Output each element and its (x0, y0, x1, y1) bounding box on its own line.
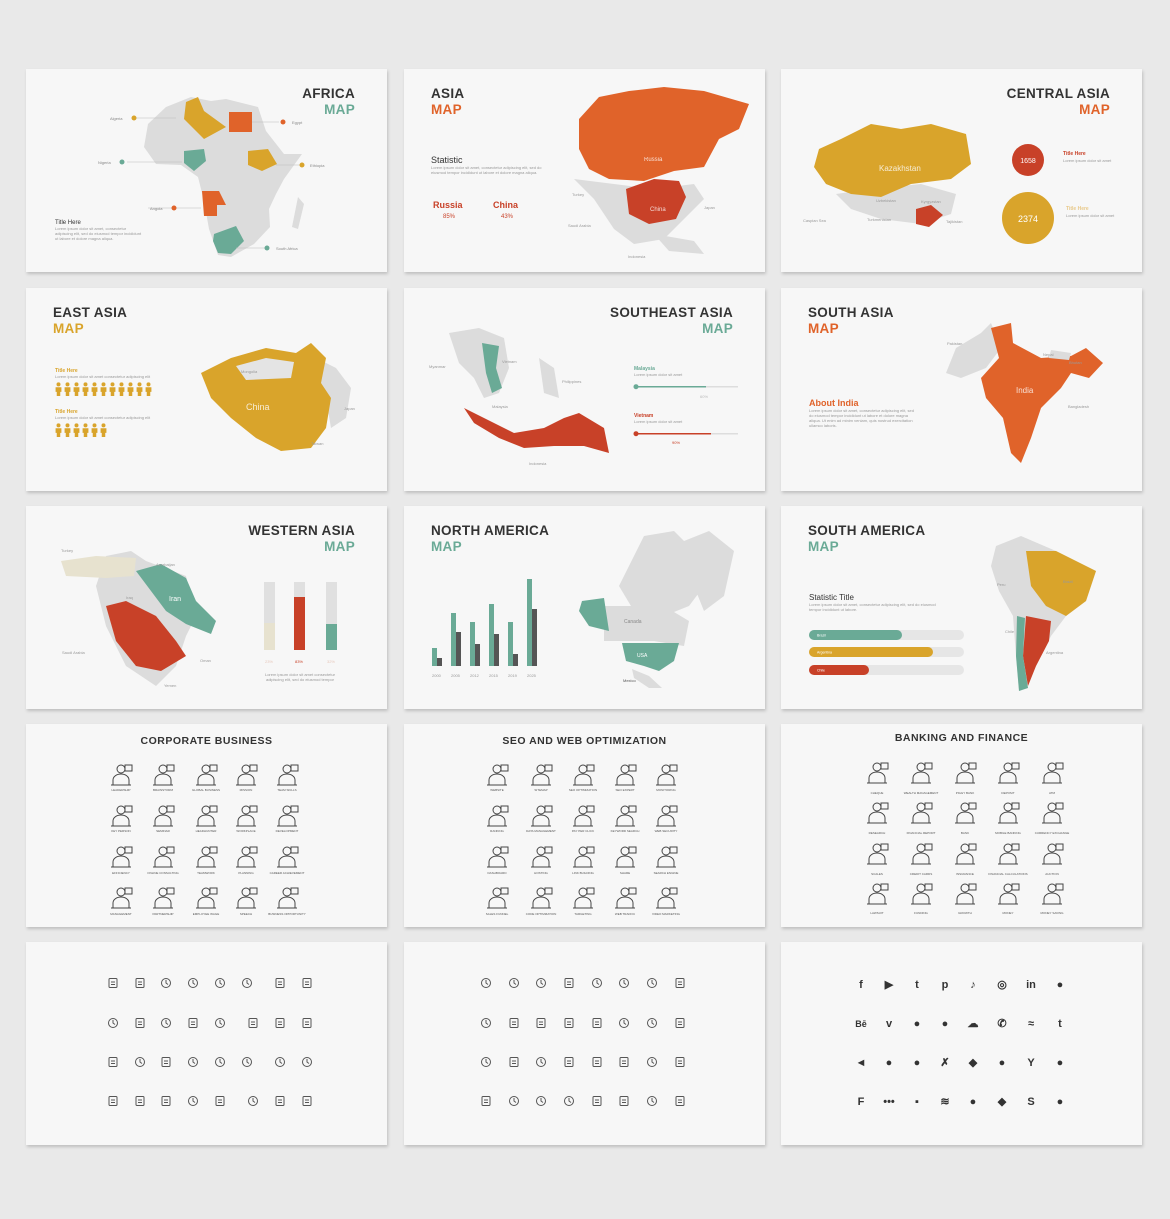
stats: people: Title Here (55, 368, 78, 374)
title (431, 86, 464, 117)
title (248, 523, 355, 554)
icon grid: DEPOSIT (1001, 791, 1015, 795)
panel: small icons 1 (26, 942, 387, 1145)
icon grid: CREDIT CARDS (910, 872, 932, 876)
map: western asia: adipiscing elit, sed do eiusmod tempor (266, 677, 335, 682)
icon grid: ● (970, 1096, 976, 1108)
chart + map: USA (637, 653, 648, 659)
icon grid (867, 762, 1070, 915)
map: africa: Ethiopia (310, 163, 325, 168)
map: east asia: China (246, 402, 270, 412)
icon grid: PIGGY BANK (956, 791, 974, 795)
icon grid: PLANNING (238, 871, 254, 875)
map: central asia: Lorem ipsum dolor sit amet (1066, 213, 1115, 218)
panel: east asia (26, 288, 387, 491)
map: southeast asia: Malaysia (634, 366, 655, 372)
text block: statistic (431, 155, 542, 175)
stats: people (55, 368, 152, 437)
map: central asia: Kyrgyzstan (921, 199, 941, 204)
title (808, 305, 894, 336)
map: central asia: Title Here (1066, 206, 1089, 212)
icon grid: SHARE (620, 871, 630, 875)
text block: Statistic Title (809, 593, 854, 602)
map: central asia: 2374 (1018, 214, 1038, 224)
icon grid: ● (1057, 1057, 1063, 1069)
text block: Lorem ipsum dolor sit amet, consectetur adipiscing elit, sed do eiusmod tempor incididunt ut labore et dolore magna aliqua. (55, 226, 141, 241)
icon grid: FUNDING (914, 911, 928, 915)
map: africa: Algeria (110, 116, 123, 121)
icon grid: ✆ (997, 1018, 1007, 1030)
icon grid: GLOBAL BUSINESS (192, 788, 220, 792)
icon grid: WEB TRAFFIC (615, 912, 636, 916)
icon grid: ● (999, 1057, 1005, 1069)
icon grid: ≈ (1028, 1018, 1034, 1030)
title: NORTH AMERICA (431, 523, 549, 538)
icon grid: LEADERSHIP (111, 788, 131, 792)
map: southeast asia: Vietnam (502, 359, 517, 364)
panel: western asia (26, 506, 387, 709)
icon grid: CHEQUE (871, 791, 883, 795)
map: south america: Chile (1005, 629, 1015, 634)
map: western asia: 32% (327, 659, 335, 664)
map: india: Bhutan (1069, 360, 1082, 365)
map: east asia (201, 343, 355, 451)
icon grid: WEB SECURITY (655, 829, 677, 833)
map: western asia: Oman (200, 658, 211, 663)
panel: small icons 2 (404, 942, 765, 1145)
map: asia: Indonesia (628, 254, 646, 259)
icon grid: ◎ (997, 979, 1007, 991)
map: southeast asia: Malaysia (492, 404, 509, 409)
icon grid: HOSTING (534, 871, 548, 875)
chart + map: Canada (624, 619, 642, 625)
icon grid: ≋ (940, 1096, 950, 1108)
icon grid: v (886, 1018, 893, 1030)
icon grid: MOBILE BANKING (995, 831, 1021, 835)
icon grid: FINANCIAL CALCULATIONS (988, 872, 1028, 876)
map: africa (98, 97, 325, 257)
map: southeast asia: Vietnam (634, 413, 654, 419)
map: africa: South Africa (276, 246, 298, 251)
title: MAP (324, 102, 355, 117)
title: SOUTH AMERICA (808, 523, 925, 538)
panel: asia map: Russia (433, 200, 463, 210)
icon grid: SCALES (871, 872, 883, 876)
icon grid: ☁ (968, 1018, 978, 1030)
icon grid: PAY PER CLICK (572, 829, 594, 833)
panel: asia map (404, 69, 765, 272)
map: india: India (1016, 386, 1034, 395)
map: south america (809, 536, 1096, 691)
icon grid: LAWSUIT (870, 911, 884, 915)
title: AFRICA (302, 86, 355, 101)
icon grid: LINK BUILDING (572, 871, 594, 875)
icon grid: WORKPLACE (236, 829, 256, 833)
icon grid: ATM (1049, 791, 1056, 795)
icon grid: CURRENCY EXCHANGE (1035, 831, 1069, 835)
icon grid: DASHBOARD (487, 871, 507, 875)
heading: CORPORATE BUSINESS (141, 735, 272, 747)
stats: people: Lorem ipsum dolor sit amet consectetur adipiscing elit (55, 415, 150, 420)
icon grid: SPEECH (240, 912, 252, 916)
title: MAP (808, 539, 839, 554)
panel: africa map (26, 69, 387, 272)
icon grid: S (1027, 1096, 1035, 1108)
icon grid: ● (942, 1018, 948, 1030)
map: central asia: Tajikistan (946, 219, 962, 224)
map: south america: Peru (997, 582, 1005, 587)
chart + map: 2019 (508, 673, 518, 678)
icon grid: ◆ (968, 1057, 978, 1069)
map: africa: Angola (150, 206, 163, 211)
icon grid: ▪ (915, 1096, 919, 1108)
map: western asia: Iran (169, 596, 181, 603)
map: asia: Saudi Arabia (568, 223, 591, 228)
icon grid: SEARCH ENGINE (654, 871, 678, 875)
map: central asia: 1658 (1020, 158, 1036, 165)
panel: corporate business icons (26, 724, 387, 927)
map: western asia: Lorem ipsum dolor sit amet consectetur (265, 672, 336, 677)
icon grid: EMPLOYEE WAGE (193, 912, 219, 916)
title: MAP (431, 102, 462, 117)
title: SOUTHEAST ASIA (610, 305, 733, 320)
map: western asia: Azerbaijan (156, 562, 175, 567)
map: asia: Japan (704, 205, 715, 210)
map: southeast asia: Philippines (562, 379, 581, 384)
map: south america: Brazil (817, 634, 826, 638)
icon grid: ◄ (856, 1057, 866, 1069)
map: south america: Chile (817, 668, 825, 672)
icon grid: t (1058, 1018, 1062, 1030)
icon grid (481, 978, 684, 1106)
chart + map: 2000 (432, 673, 442, 678)
icon grid: INSURANCE (956, 872, 974, 876)
map: asia: Turkey (572, 192, 584, 197)
icon grid: KEYWORD SEARCH (611, 829, 639, 833)
icon grid: in (1026, 979, 1036, 991)
icon grid (108, 978, 312, 1106)
title (302, 86, 355, 117)
icon grid: ● (914, 1057, 920, 1069)
icon grid: BANK (961, 831, 969, 835)
chart + map: Mexico (623, 678, 636, 683)
text block: Title Here (55, 220, 81, 226)
panel: asia map: 43% (501, 214, 513, 220)
icon grid: SEO EXPERT (615, 788, 635, 792)
icon grid: ONLINE CONSULTING (147, 871, 179, 875)
map: central asia: Turkmenistan (867, 217, 891, 222)
text block (809, 398, 914, 428)
icon grid: Y (1027, 1057, 1035, 1069)
icon grid (855, 979, 1063, 1108)
text block (55, 220, 142, 241)
map: asia: China (650, 207, 666, 213)
icon grid: ••• (883, 1096, 895, 1108)
map: western asia: 23% (265, 659, 273, 664)
stats: people: Title Here (55, 409, 78, 415)
map: western asia: Turkey (61, 548, 73, 553)
stats (433, 200, 518, 220)
icon grid: TARGETING (574, 912, 592, 916)
icon grid: SEMINAR (156, 829, 171, 833)
icon grid: MONITORING (656, 788, 676, 792)
map: east asia: Taiwan (311, 441, 323, 446)
icon grid: ● (886, 1057, 892, 1069)
icon grid: t (915, 979, 919, 991)
icon grid (110, 764, 306, 916)
title: MAP (53, 321, 84, 336)
icon grid: BUSINESS OPPORTUNITY (268, 912, 306, 916)
icon grid: FINANCIAL REPORT (907, 831, 936, 835)
panel: banking icons (781, 724, 1142, 927)
map: central asia: Kazakhstan (879, 164, 921, 173)
icon grid: ✗ (940, 1057, 950, 1069)
icon grid: F (858, 1096, 865, 1108)
icon grid: BRAINSTORM (153, 788, 173, 792)
map: india: Pakistan (947, 341, 962, 346)
map: africa: Nigeria (98, 160, 111, 165)
title: MAP (808, 321, 839, 336)
heading: SEO AND WEB OPTIMIZATION (502, 735, 667, 747)
map: central asia: Title Here (1063, 151, 1086, 157)
text block: About India (809, 398, 858, 408)
title: MAP (702, 321, 733, 336)
icon grid (486, 764, 681, 916)
title (1007, 86, 1110, 117)
icon grid: SITEMAP (534, 788, 548, 792)
panel: central asia (781, 69, 1142, 272)
map: southeast asia: Lorem ipsum dolor sit amet (634, 419, 683, 424)
icon grid: KEY PERSON (111, 829, 131, 833)
icon grid: TEAM SKILLS (277, 788, 297, 792)
heading: BANKING AND FINANCE (895, 732, 1028, 744)
chart + map: 2025 (527, 673, 537, 678)
title (808, 523, 925, 554)
stats: people: Lorem ipsum dolor sit amet consectetur adipiscing elit (55, 374, 150, 379)
map: east asia: Mongolia (241, 369, 258, 374)
icon grid: DATA MANAGEMENT (526, 829, 556, 833)
panel: seo icons (404, 724, 765, 927)
icon grid: WEALTH MANAGEMENT (904, 791, 938, 795)
title: MAP (324, 539, 355, 554)
icon grid: RESEARCH (869, 831, 885, 835)
icon grid: ◆ (997, 1096, 1007, 1108)
text block: Lorem ipsum dolor sit amet, consectetur adipiscing elit, sed do eiusmod tempor incididunt ut labore et dolore magna aliqua. Ut enim ad minim veniam, quis nostrud exercitation ullamco laboris. (809, 408, 914, 428)
map: south america: Brazil (1063, 579, 1073, 584)
icon grid: PARTNERSHIP (152, 912, 174, 916)
icon grid: MONEY SAVING (1041, 911, 1064, 915)
map: asia (568, 87, 749, 259)
panel: south america (781, 506, 1142, 709)
icon grid: VIDEO MARKETING (652, 912, 681, 916)
map: western asia: 83% (295, 659, 303, 664)
map: india (946, 323, 1103, 463)
icon grid: ♪ (970, 979, 976, 991)
map: southeast asia (429, 328, 738, 466)
title: WESTERN ASIA (248, 523, 355, 538)
icon grid: EFFICIENCY (112, 871, 130, 875)
chart + map: 2015 (489, 673, 499, 678)
icon grid: MISSION (240, 788, 252, 792)
icon grid: AUCTION (1045, 872, 1059, 876)
title (610, 305, 733, 336)
map: southeast asia: 60% (700, 394, 708, 399)
panel: asia map: China (493, 200, 518, 210)
chart + map: 2012 (470, 673, 480, 678)
title: MAP (431, 539, 462, 554)
icon grid: HEADHUNTER (196, 829, 217, 833)
text block: statistic: Lorem ipsum dolor sit amet, consectetur adipiscing elit, sed do eiusmod tempor incididunt ut labore et dolore magna aliqua. (431, 165, 542, 175)
icon grid: ● (914, 1018, 920, 1030)
title: CENTRAL ASIA (1007, 86, 1110, 101)
panel: south asia (781, 288, 1142, 491)
icon grid: ▶ (884, 979, 894, 991)
icon grid: RANKING (490, 829, 504, 833)
icon grid: MONEY (1002, 911, 1014, 915)
map: south america: Argentina (1046, 650, 1064, 655)
map: southeast asia: Indonesia (529, 461, 547, 466)
icon grid: DEVELOPMENT (276, 829, 299, 833)
title (53, 305, 127, 336)
map: central asia: Caspian Sea (803, 218, 827, 223)
text block (809, 593, 936, 612)
chart + map (432, 531, 734, 688)
map: central asia: Uzbekistan (876, 198, 896, 203)
icon grid: GROWTH (958, 911, 972, 915)
title: EAST ASIA (53, 305, 127, 320)
title: MAP (1079, 102, 1110, 117)
title (431, 523, 549, 554)
icon grid: SEO OPTIMIZATION (569, 788, 597, 792)
map: india: Bangladesh (1068, 404, 1089, 409)
title: SOUTH ASIA (808, 305, 894, 320)
panel: asia map: 85% (443, 214, 455, 220)
icon grid: ● (1057, 979, 1063, 991)
panel: north america (404, 506, 765, 709)
map: south america: Argentina (817, 650, 832, 654)
map: asia: Russia (644, 157, 663, 163)
map: western asia: Iraq (126, 595, 133, 600)
map: east asia: Japan (344, 406, 355, 411)
map: southeast asia: 90% (672, 440, 680, 445)
icon grid: MANAGEMENT (110, 912, 132, 916)
icon grid: f (859, 979, 863, 991)
map: western asia: Saudi Arabia (62, 650, 85, 655)
map: central asia (803, 124, 1115, 244)
icon grid: ● (1057, 1096, 1063, 1108)
icon grid: SALES FUNNEL (486, 912, 509, 916)
map: africa: Egypt (292, 120, 303, 125)
title: ASIA (431, 86, 464, 101)
icon grid: WEBSITE (490, 788, 504, 792)
icon grid: TEAMWORK (197, 871, 215, 875)
icon grid: Bē (855, 1019, 867, 1029)
icon grid: CODE OPTIMIZATION (526, 912, 556, 916)
map: western asia: Yemen (164, 683, 176, 688)
map: central asia: Lorem ipsum dolor sit amet (1063, 158, 1112, 163)
text block: statistic: Statistic (431, 155, 463, 165)
map: india: Nepal (1043, 352, 1054, 357)
map: southeast asia: Lorem ipsum dolor sit amet (634, 372, 683, 377)
panel: social icons (781, 942, 1142, 1145)
map: southeast asia: Myanmar (429, 364, 446, 369)
icon grid: p (942, 979, 949, 991)
panel: southeast asia (404, 288, 765, 491)
chart + map: 2005 (451, 673, 461, 678)
text block: Lorem ipsum dolor sit amet, consectetur adipiscing elit, sed do eiusmod tempor incididunt ut labore. (809, 602, 936, 612)
icon grid: CAREER ACHIEVEMENT (270, 871, 305, 875)
map: western asia (61, 548, 337, 688)
